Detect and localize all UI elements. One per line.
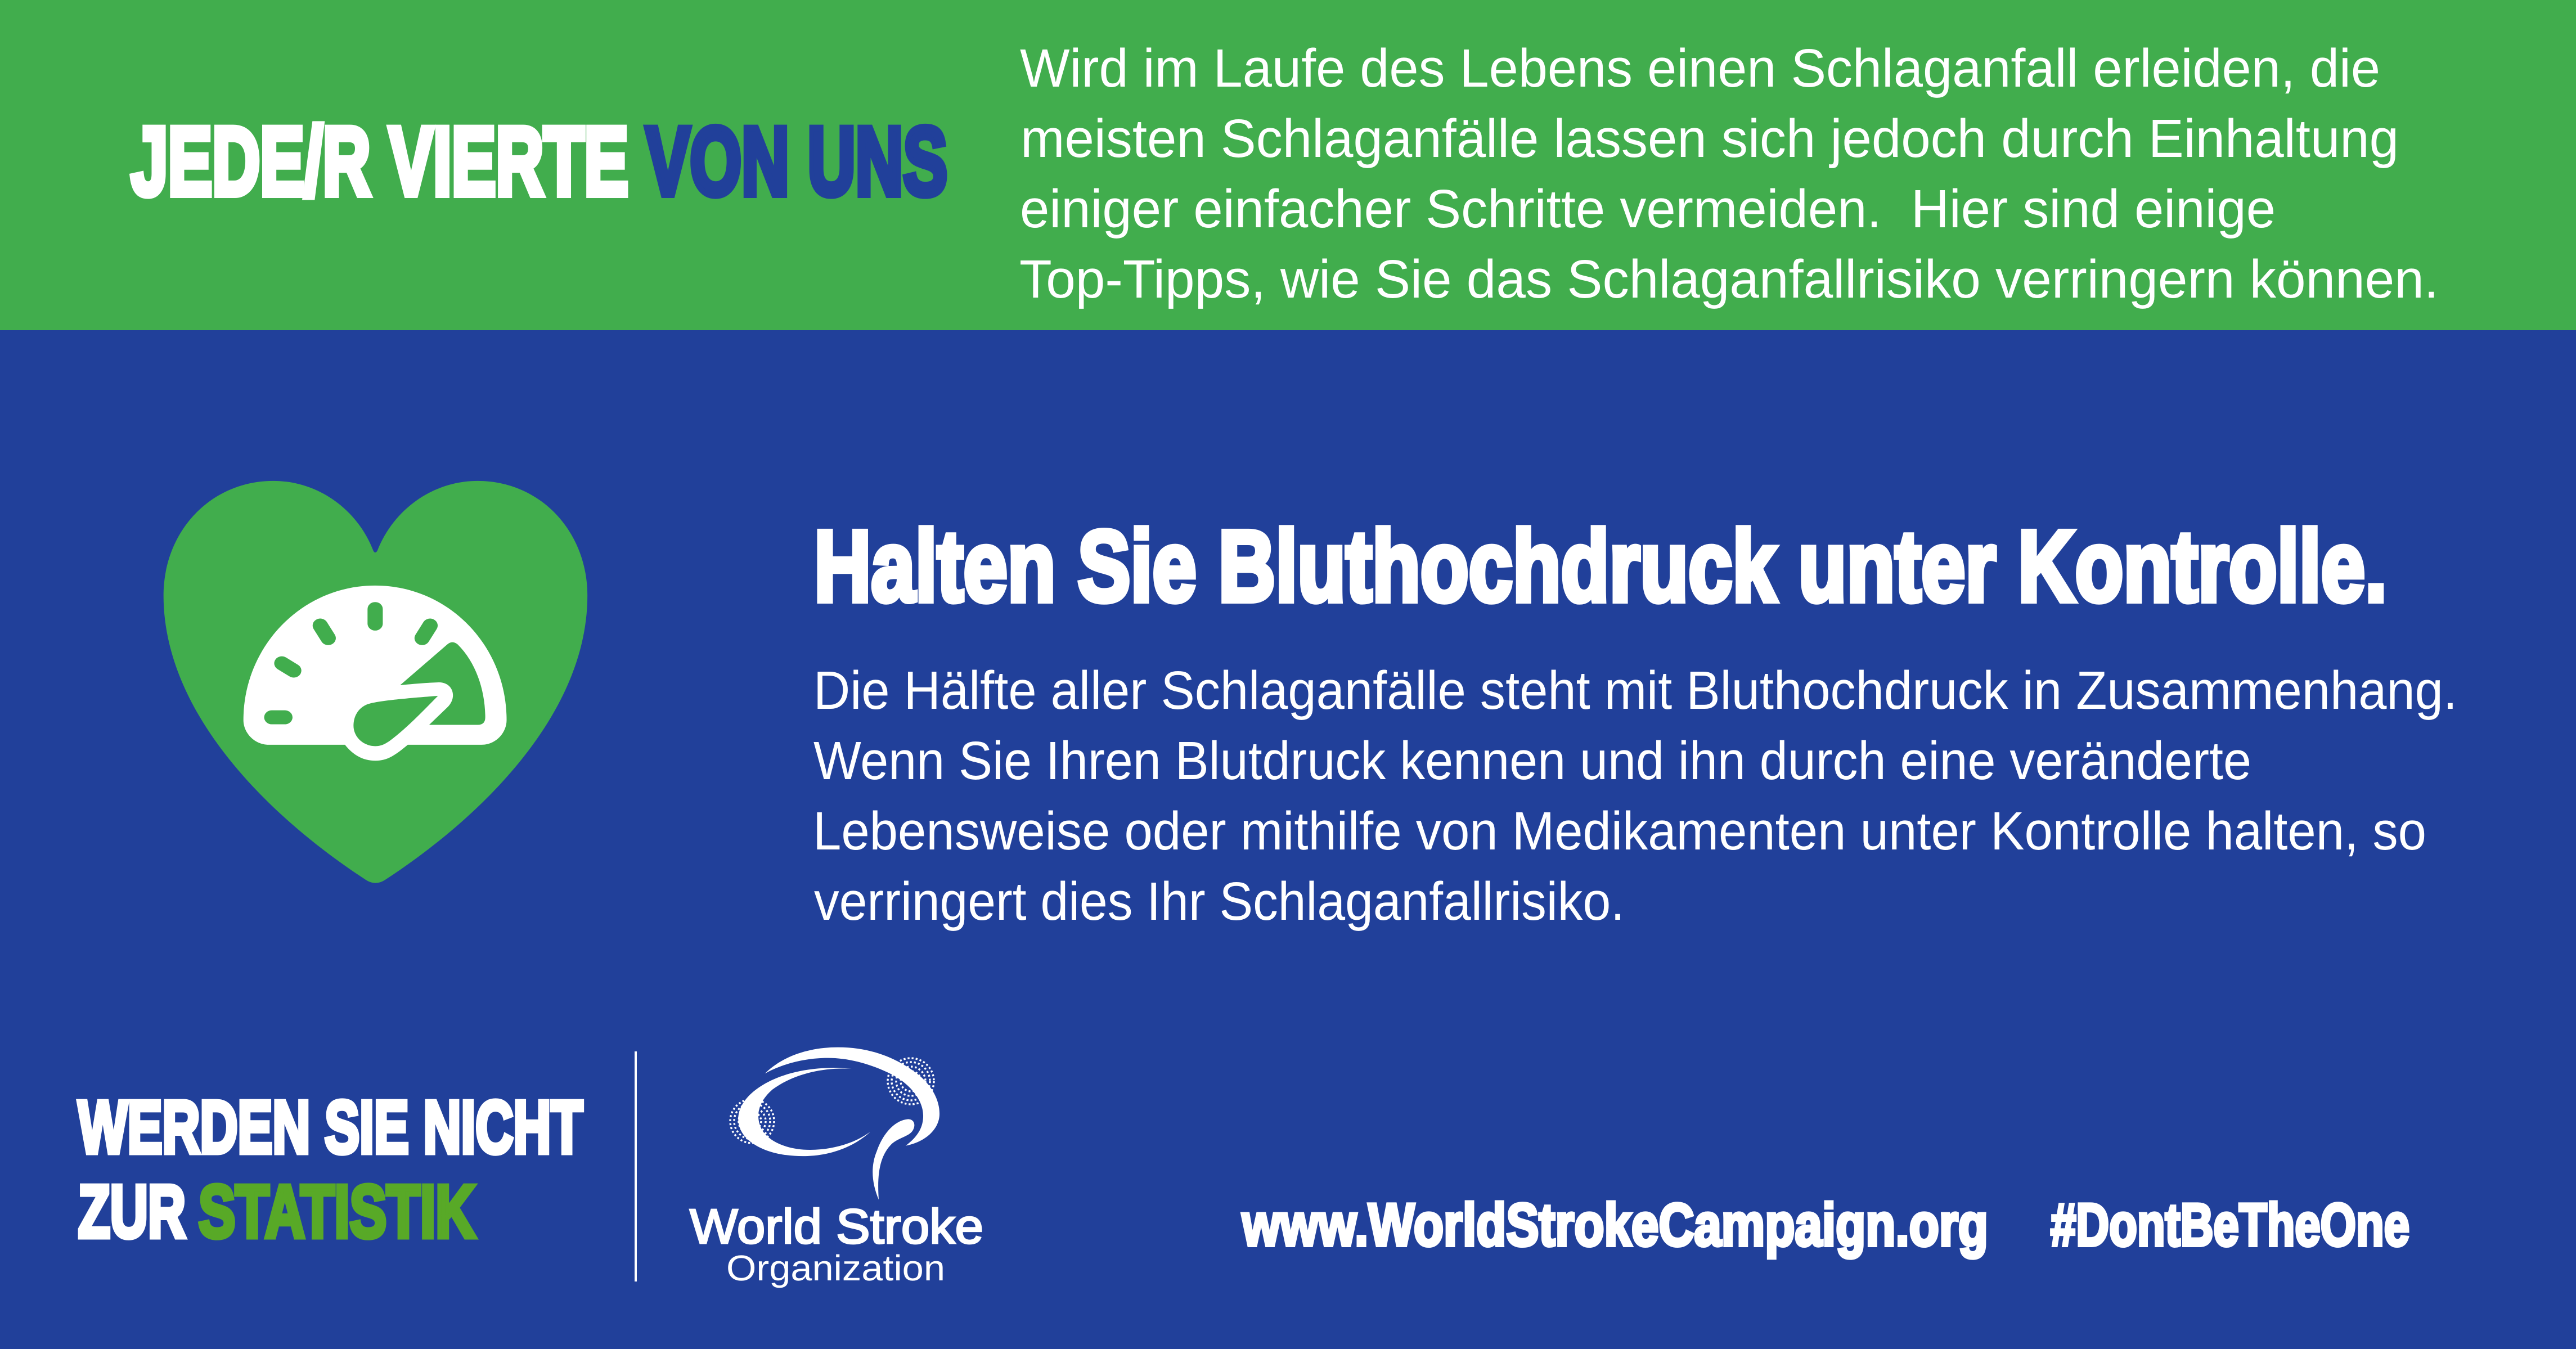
logo: World Stroke Organization: Organization [726,1248,945,1288]
body text block: Die Hälfte aller Schlaganfälle steht mit Bluthochdruck in Zusammenhang. [813,660,2457,721]
logo dots [730,1058,934,1143]
intro text block [1019,38,2439,309]
body text block [813,660,2457,932]
gauge ticks [272,609,430,717]
gauge dial [244,586,507,761]
gauge needle [353,696,438,746]
intro text block: Wird im Laufe des Lebens einen Schlaganfall erleiden, die [1020,38,2380,98]
icon: heart with blood pressure gauge [164,481,587,883]
body text block: verringert dies Ihr Schlaganfallrisiko. [814,871,1625,932]
body text block: Lebensweise oder mithilfe von Medikamenten unter Kontrolle halten, so [813,801,2426,861]
gauge red zone [400,642,485,725]
divider [635,1051,637,1281]
slogan: Werden Sie nicht zur Statistik: STATISTIK [199,1170,475,1253]
logo: World Stroke Organization [690,1047,983,1288]
hashtag: #DontBeTheOne [2051,1191,2409,1258]
logo brain swooshes [738,1047,939,1200]
intro text block: Top-Tipps, wie Sie das Schlaganfallrisiko verringern können. [1019,249,2439,309]
heading: Jede/r vierte von uns: JEDE/R VIERTE [131,107,628,215]
heart [164,481,587,883]
body text block: Wenn Sie Ihren Blutdruck kennen und ihn durch eine veränderte [813,731,2251,791]
website url: www.WorldStrokeCampaign.org [1242,1191,1988,1258]
slogan: Werden Sie nicht zur Statistik: ZUR [78,1170,186,1253]
slogan: Werden Sie nicht zur Statistik [78,1086,583,1253]
heading: Jede/r vierte von uns: VON UNS [646,107,947,215]
intro text block: meisten Schlaganfälle lassen sich jedoch durch Einhaltung [1020,109,2399,169]
slogan: Werden Sie nicht zur Statistik: WERDEN SIE NICHT [78,1086,583,1168]
panel: green header band [0,0,2576,330]
logo wordmark: World Stroke [690,1199,983,1254]
intro text block: einiger einfacher Schritte vermeiden. Hier sind einige [1020,179,2276,239]
